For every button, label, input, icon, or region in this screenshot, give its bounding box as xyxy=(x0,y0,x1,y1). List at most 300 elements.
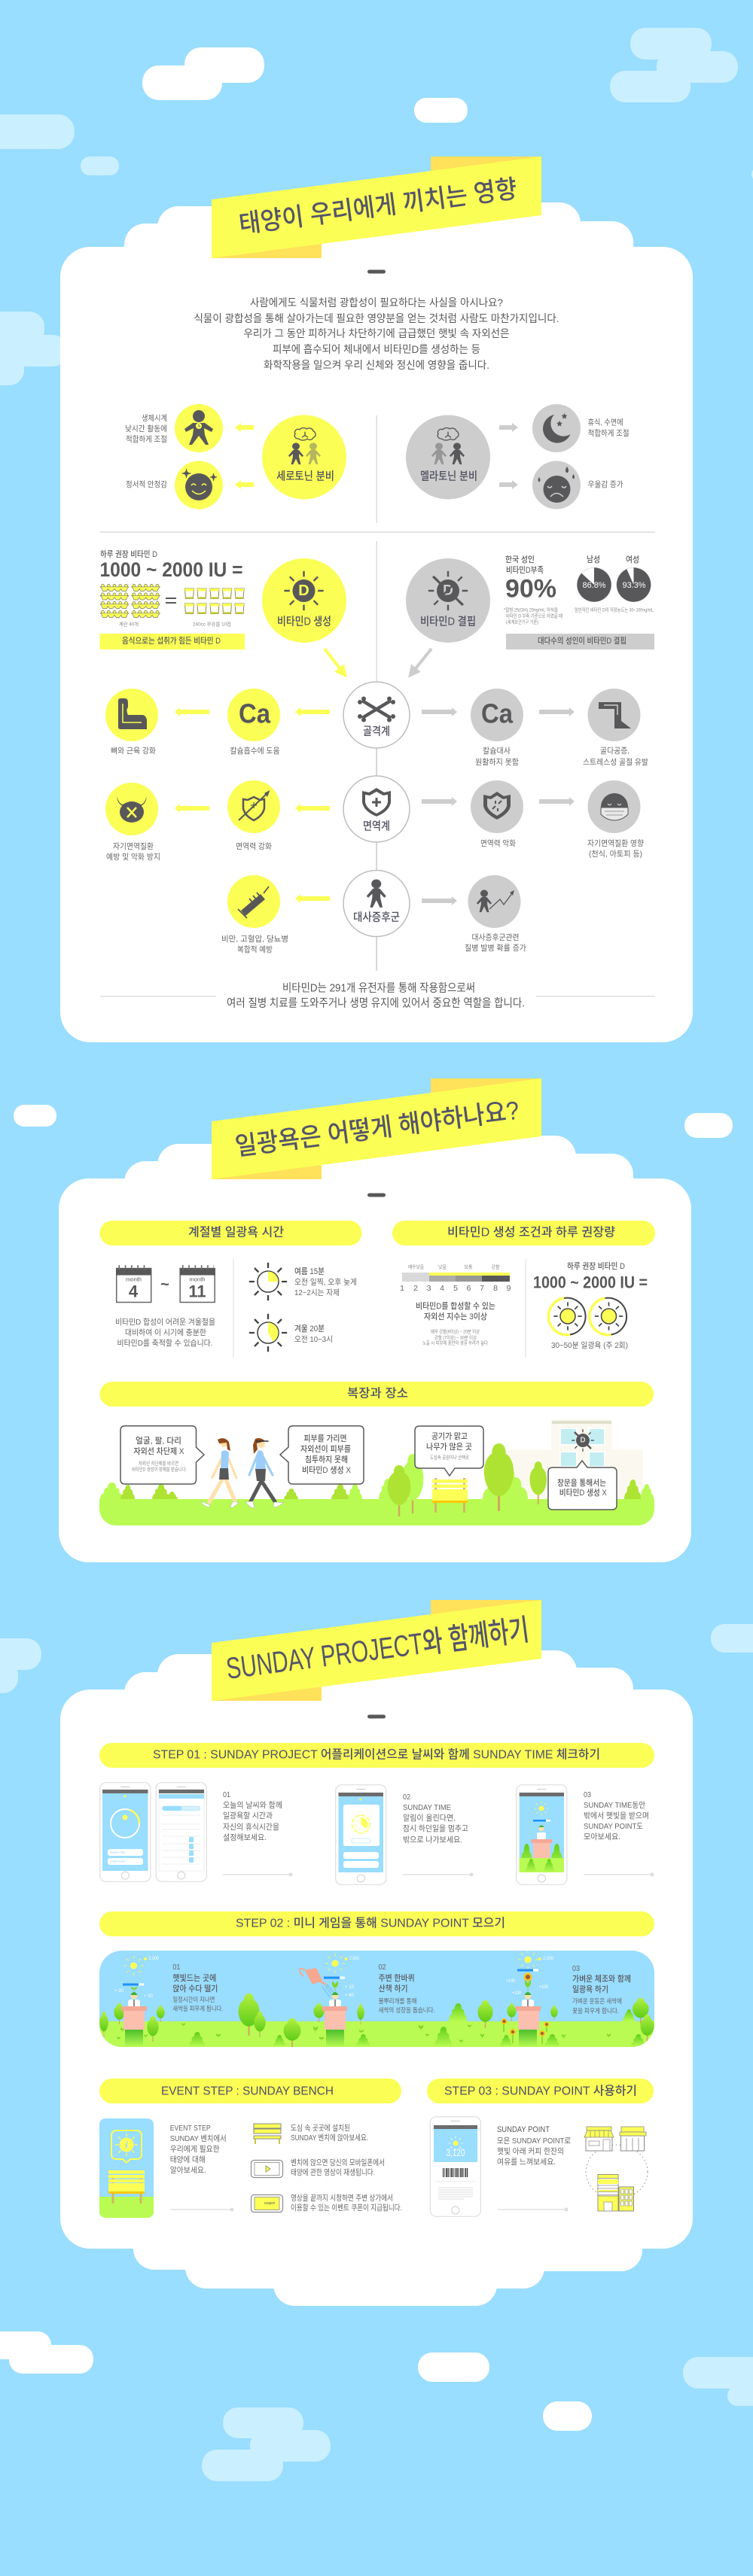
caption: (천식, 아토피 등) xyxy=(589,850,642,859)
icon: sun blocked by window xyxy=(572,1429,594,1452)
number: 1000 ~ 2000 IU = xyxy=(533,1273,648,1291)
icon: summer sun clock xyxy=(249,1263,287,1300)
game character 2 with watering can xyxy=(300,1954,360,2047)
caption: 30~50분 일광욕 (주 2회) xyxy=(551,1340,628,1350)
text: 이용할 수 있는 이벤트 쿠폰이 지급됩니다. xyxy=(291,2203,402,2213)
step text 02 xyxy=(379,1963,435,2014)
icon: sun arc 2 xyxy=(590,1298,626,1335)
text xyxy=(291,2193,402,2213)
building xyxy=(508,1419,643,1502)
game character 2 with watering can: 2,000 xyxy=(349,1957,360,1961)
tilde: ~ xyxy=(160,1276,169,1293)
step text 02: 물뿌리개를 통해 xyxy=(379,1997,417,2005)
callout: sunscreen: 자외선 차단제 X xyxy=(134,1446,184,1456)
text: 도심 속 곳곳에 설치된 xyxy=(291,2124,350,2133)
arrow xyxy=(175,707,209,716)
step 01 item 03 text: 03 xyxy=(584,1790,591,1799)
step text 01: 새싹을 피우게 됩니다. xyxy=(172,2005,223,2012)
game character 3 with flower: +100 xyxy=(512,1991,522,1996)
step 01: phone screen main xyxy=(100,1783,151,1881)
closing statement xyxy=(99,981,655,1010)
dotted ring xyxy=(586,2145,648,2199)
arrow xyxy=(295,804,330,813)
node: immune xyxy=(343,776,410,842)
text: summer: 12~2시는 자제 xyxy=(294,1288,340,1297)
scale numbers xyxy=(400,1284,511,1293)
icon: sun blocked by window: D xyxy=(580,1436,586,1445)
icon: broken leg xyxy=(587,689,640,741)
step 03: phone with barcode xyxy=(430,2117,480,2216)
step 01 item 02 text xyxy=(403,1793,473,1877)
callout: through window: 비타민D 생성 X xyxy=(559,1488,607,1498)
text: emotional stability: 정서적 안정감 xyxy=(126,480,167,489)
heading ribbon: section 2 xyxy=(212,1078,541,1179)
pie chart: male 86.8% xyxy=(577,567,611,602)
icon: broken sun D: D xyxy=(443,582,453,599)
step text 02: 산책 하기 xyxy=(379,1983,408,1994)
text: 벤치에 앉으면 당신의 모바일폰에서 xyxy=(291,2158,385,2167)
scale numbers: 8 xyxy=(493,1284,498,1293)
scale numbers: 7 xyxy=(480,1284,484,1293)
arrow xyxy=(295,707,330,716)
event step text: 알아보세요. xyxy=(170,2166,206,2175)
icon: strong muscle xyxy=(105,689,158,741)
arrow: grey to skeletal xyxy=(410,649,431,675)
icon: calcium absorption xyxy=(227,689,280,741)
game character 2 with watering can: + 60 xyxy=(345,1994,355,1998)
scale numbers: 3 xyxy=(427,1284,431,1293)
legend: 낮음 xyxy=(438,1263,447,1270)
game character 3 with flower: +100 xyxy=(506,1979,516,1984)
caption: 면역력 악화 xyxy=(480,839,516,848)
panel: section 1 white cloud card xyxy=(60,202,693,1042)
step text 01 xyxy=(172,1963,223,2012)
callout: through window: 창문을 통해서는 xyxy=(557,1478,606,1488)
arrow xyxy=(422,797,457,806)
footnotes: 일반적인 비타민 D의 적정농도는 30~100ng/mL xyxy=(575,607,654,613)
footnotes xyxy=(504,607,654,625)
vitamin D synthesis circle xyxy=(262,558,346,643)
pill heading: event step xyxy=(99,2079,401,2103)
step 01: phone screen settings xyxy=(156,1783,206,1881)
recommended exposure xyxy=(533,1261,648,1350)
section marker xyxy=(367,1714,386,1719)
icon: masked face xyxy=(587,780,640,833)
heading ribbon: section 2: 일광욕은 어떻게 해야하나요? xyxy=(233,1096,521,1161)
step 03 text: 여유를 느껴보세요. xyxy=(497,2158,556,2167)
intro text block: 사람에게도 식물처럼 광합성이 필요하다는 사실을 아시나요? xyxy=(250,297,503,309)
icon: yellow bench xyxy=(432,1478,468,1513)
text xyxy=(115,1318,215,1348)
icon: calcium metabolism poor: Ca xyxy=(481,698,514,728)
icon: person and rising chart xyxy=(468,875,521,928)
immune row xyxy=(105,776,644,862)
sprouts xyxy=(117,2023,611,2043)
notes xyxy=(422,1328,488,1346)
text xyxy=(416,1300,495,1321)
text: rest and sleep: 휴식, 수면에 xyxy=(588,418,623,427)
icon: body clock xyxy=(175,404,223,452)
icon: calcium absorption: Ca xyxy=(239,698,271,728)
callout xyxy=(99,634,245,649)
icon: phone coupon xyxy=(252,2194,283,2213)
icon: shield and spear xyxy=(227,780,280,833)
pill heading: step 03 xyxy=(427,2079,654,2103)
icon: phone play xyxy=(252,2160,283,2178)
trees xyxy=(388,1443,547,1516)
illustration: woman in shorts xyxy=(201,1438,239,1508)
icon: devil X xyxy=(105,783,158,835)
text: rest and sleep: 적합하게 조절 xyxy=(588,428,630,438)
callout: 음식으로는 섭취가 힘든 비타민 D xyxy=(122,635,221,646)
step 01 item 01 text: 자신의 휴식시간을 xyxy=(223,1823,279,1832)
arrow xyxy=(235,423,254,432)
game character 2 with watering can: + 10 xyxy=(345,1985,355,1990)
captions xyxy=(119,620,231,628)
equals sign xyxy=(166,598,176,603)
callout: sunscreen xyxy=(120,1426,204,1484)
icon: calcium metabolism poor xyxy=(471,689,523,741)
icon: dark person xyxy=(288,443,303,464)
caption: 뼈와 근육 강화 xyxy=(111,747,156,756)
callout: clean air: 공기가 맑고 xyxy=(431,1431,468,1441)
scale numbers: 9 xyxy=(507,1284,511,1293)
step 03 text: SUNDAY POINT xyxy=(497,2125,550,2134)
captions: 계란 40개 xyxy=(119,620,139,628)
section marker xyxy=(367,269,386,274)
label: 세로토닌 분비 xyxy=(276,470,334,483)
arrow xyxy=(295,894,330,903)
step text 01: 앉아 수다 떨기 xyxy=(172,1984,218,1994)
icon: sun D: D xyxy=(298,582,309,599)
heading: 한국 성인 xyxy=(505,555,535,564)
pill heading: step 03: STEP 03 : SUNDAY POINT 사용하기 xyxy=(444,2085,637,2098)
icon: calendar April: 4 xyxy=(129,1282,139,1300)
callout: skin covered: 비타민D 생성 X xyxy=(302,1465,352,1475)
step text 03: 03 xyxy=(572,1964,580,1973)
trees and bushes xyxy=(99,1994,654,2047)
labels: 여성 xyxy=(626,555,639,564)
labels xyxy=(587,555,639,564)
icon: brain xyxy=(294,428,316,440)
icon: 10 cups of milk xyxy=(185,588,244,614)
step 01 item 01 text: 일광욕할 시간과 xyxy=(223,1811,273,1820)
caption: 칼슘대사 xyxy=(483,746,511,756)
game character 1 xyxy=(114,1956,160,2047)
step 01 item 02 text: 02 xyxy=(403,1793,410,1802)
scale numbers: 5 xyxy=(453,1284,458,1293)
vitamin D deficiency circle xyxy=(406,558,490,643)
notes: 노출 시 피부에 홍반이 생길 우려가 높다 xyxy=(422,1340,488,1346)
caption: 복합적 예방 xyxy=(237,944,273,954)
captions: 240cc 우유를 10컵 xyxy=(193,622,231,628)
step text 01: 01 xyxy=(172,1963,181,1972)
icon: calendar November: month xyxy=(190,1278,206,1282)
caption xyxy=(583,747,648,767)
section marker xyxy=(367,1194,386,1197)
arrow xyxy=(422,707,457,716)
pill heading: clothing and place xyxy=(99,1382,654,1407)
text: body clock: 적합하게 조절 xyxy=(126,434,167,444)
pie chart: female 93.3% xyxy=(617,567,651,602)
pill heading: clothing and place: 복장과 장소 xyxy=(347,1386,408,1400)
notes: 매우 강함(9이상) – 20분 이상 xyxy=(431,1328,480,1335)
text: summer xyxy=(294,1267,357,1297)
event step text: 태양에 대해 xyxy=(170,2155,206,2164)
text: depression: 우울감 증가 xyxy=(588,480,623,489)
scale numbers: 4 xyxy=(440,1284,444,1293)
closing statement: 비타민D는 291개 유전자를 통해 작용함으로써 xyxy=(282,981,475,995)
scale numbers: 2 xyxy=(413,1284,418,1293)
closing statement: 여러 질병 치료를 도와주거나 생명 유지에 있어서 중요한 역할을 합니다. xyxy=(227,996,525,1010)
event step text: EVENT STEP xyxy=(170,2124,211,2133)
sun clocks xyxy=(249,1263,357,1352)
ground xyxy=(99,1499,654,1525)
divider lines xyxy=(233,1259,526,1358)
game character 1: 2,000 xyxy=(148,1957,160,1961)
arrow xyxy=(422,896,457,905)
text: 비타민D 합성이 어려운 겨울철을 xyxy=(115,1318,215,1327)
caption: 골다공증, xyxy=(600,747,630,756)
caption: 대사증후군관련 xyxy=(471,933,520,942)
step 01 item 03 text xyxy=(584,1790,654,1877)
text: 비타민D를 합성할 수 있는 xyxy=(416,1300,495,1311)
step 01 item 03 text: SUNDAY TIME동안 xyxy=(584,1801,645,1810)
text: SUNDAY 벤치에 앉아보세요. xyxy=(291,2133,368,2143)
step 01 item 02 text: 알림이 울린다면, xyxy=(403,1814,456,1823)
illustration: woman in leggings xyxy=(245,1438,284,1508)
game character 3 with flower: 2,000 xyxy=(543,1957,554,1961)
text: body clock xyxy=(125,414,167,444)
node: immune: 면역계 xyxy=(363,820,390,832)
step 03: phone with barcode: 3,120 xyxy=(446,2146,465,2158)
label: 비타민D 생성 xyxy=(277,616,331,628)
caption xyxy=(465,933,526,953)
panel: section 2 white cloud card xyxy=(59,1136,691,1562)
icon: serotonin circle xyxy=(262,415,346,500)
heading: 하루 권장 비타민 D xyxy=(100,549,157,559)
pie chart: male 86.8%: 86.8% xyxy=(583,581,606,590)
step 01 item 01 text: 01 xyxy=(223,1790,230,1799)
arrow xyxy=(539,707,575,716)
step 01 item 01 text xyxy=(223,1790,292,1877)
text: summer: 여름 15분 xyxy=(294,1267,325,1276)
skeletal row xyxy=(105,682,648,767)
melatonin group xyxy=(406,404,630,509)
callout: sunscreen: 비타민D 생성이 방해를 받습니다. xyxy=(132,1466,187,1472)
icon: syringe xyxy=(227,875,280,928)
heading: 하루 권장 비타민 D xyxy=(567,1261,625,1271)
icon: calendar April xyxy=(116,1267,151,1302)
step text 02: 새싹의 성장을 돕습니다. xyxy=(379,2006,435,2014)
legend: 매우낮음 xyxy=(408,1263,424,1270)
caption: 자기면역질환 xyxy=(113,842,154,851)
heading: 비타민D부족 xyxy=(506,565,544,575)
step text 01: 햇빛드는 곳에 xyxy=(172,1972,216,1983)
event step text xyxy=(170,2124,233,2211)
icon: sad face xyxy=(532,461,581,509)
icon: winter sun clock xyxy=(249,1314,287,1352)
caption: 스트레스성 골절 유발 xyxy=(583,757,648,767)
icon: info bubble: i xyxy=(125,2139,128,2151)
icon: smile xyxy=(175,461,223,509)
icon: melatonin circle xyxy=(406,415,490,500)
bushes xyxy=(100,1467,654,1500)
step text 01: 일정시간이 지나면 xyxy=(172,1996,215,2003)
caption xyxy=(587,839,644,859)
text: summer: 오전 일찍, 오후 늦게 xyxy=(294,1277,357,1287)
caption: 칼슘흡수에 도움 xyxy=(230,746,280,756)
icon: shop 1 xyxy=(584,2127,614,2151)
icon: bench outline xyxy=(254,2124,281,2144)
game character 3 with flower: +100 xyxy=(539,1985,549,1990)
text: body clock: 낮시간 활동에 xyxy=(125,424,167,433)
icon: dark person xyxy=(450,443,465,464)
serotonin group xyxy=(125,404,346,509)
step 01: phone game xyxy=(517,1785,567,1884)
caption xyxy=(475,746,519,767)
panel: sunday bench card xyxy=(99,2118,154,2218)
icon: buildings xyxy=(598,2175,634,2211)
game character 3 with flower xyxy=(506,1950,554,2047)
icon: weakened shield xyxy=(471,780,523,833)
text xyxy=(291,2158,385,2177)
step text 02: 02 xyxy=(379,1963,386,1972)
caption: 원활하지 못함 xyxy=(475,757,519,767)
pill heading: vitamin D conditions xyxy=(392,1221,655,1245)
icon: faded person xyxy=(306,443,321,464)
heading ribbon: section 3: SUNDAY PROJECT와 함께하기 xyxy=(224,1613,531,1686)
caption xyxy=(106,842,160,862)
pill heading: step 01 xyxy=(99,1743,654,1768)
pill heading: vitamin D conditions: 비타민D 생성 조건과 하루 권장량 xyxy=(447,1225,615,1239)
pill heading: seasonal time: 계절별 일광욕 시간 xyxy=(188,1225,284,1239)
metabolic row xyxy=(221,870,526,954)
pill heading: event step: EVENT STEP : SUNDAY BENCH xyxy=(161,2085,334,2098)
game character 1: + 30 xyxy=(144,1994,154,1999)
callout: skin covered: 피부를 가리면 xyxy=(304,1434,346,1443)
legend xyxy=(408,1263,500,1270)
step text 02: 주변 한바퀴 xyxy=(379,1973,415,1983)
notes: 강함 (7이상) – 30분 이상 xyxy=(434,1334,477,1341)
caption: 면역력 강화 xyxy=(236,842,272,851)
caption xyxy=(221,934,288,954)
event step text: 우리에게 필요한 xyxy=(170,2145,220,2154)
callout: through window xyxy=(548,1461,617,1510)
clouds: between sections xyxy=(0,1105,753,1693)
UV index chart xyxy=(400,1263,511,1346)
callout: clean air xyxy=(415,1426,483,1476)
panel: Korean adult deficiency stats xyxy=(504,555,654,649)
arrow xyxy=(235,480,254,489)
arrow xyxy=(499,480,518,489)
callout: sunscreen: 얼굴, 팔, 다리 xyxy=(136,1435,181,1446)
step 03 text xyxy=(497,2125,571,2211)
sunflowers xyxy=(501,2018,550,2044)
step text 03: 가벼운 운동은 새싹에 xyxy=(572,1997,622,2005)
pill heading: seasonal time xyxy=(99,1221,361,1245)
node: skeletal: 골격계 xyxy=(363,725,390,738)
icon: calendar April: month xyxy=(126,1278,142,1282)
heading ribbon: section 1: 태양이 우리에게 끼치는 영향 xyxy=(237,175,519,239)
scale numbers: 6 xyxy=(467,1284,471,1293)
callout: skin covered: 침투하지 못해 xyxy=(305,1455,348,1464)
footnotes: (세계보건기구 기준) xyxy=(506,619,538,625)
pill heading: step 02 xyxy=(99,1911,654,1936)
intro text block: 우리가 그 동안 피하거나 차단하기에 급급했던 햇빛 속 자외선은 xyxy=(244,327,510,339)
text: winter: 겨울 20분 xyxy=(294,1324,325,1334)
heading ribbon: section 3 xyxy=(212,1600,541,1701)
label: 멜라토닌 분비 xyxy=(420,470,477,483)
text: 대비하여 이 시기에 충분한 xyxy=(125,1328,206,1337)
icon: calendar November: 11 xyxy=(188,1282,206,1300)
panel: section 3 white cloud card xyxy=(60,1650,693,2306)
text: 태양에 관한 영상이 재생됩니다. xyxy=(291,2167,375,2177)
step text 03: 가벼운 체조와 함께 xyxy=(572,1973,631,1984)
intro text block: 식물이 광합성을 통해 살아가는데 필요한 영양분을 얻는 것처럼 사람도 마찬가지입니다. xyxy=(194,312,559,324)
step 01 item 01 text: 설정해보세요. xyxy=(223,1832,267,1842)
clouds: bottom xyxy=(0,2331,753,2481)
icon: sun arc 1 xyxy=(548,1298,586,1335)
icon: bench xyxy=(108,2170,145,2203)
calendars xyxy=(115,1267,215,1348)
caption: 비만, 고혈압, 당뇨병 xyxy=(221,934,288,944)
step 01 item 02 text: 밖으로 나가보세요. xyxy=(403,1835,462,1845)
number: 1000 ~ 2000 IU = xyxy=(99,558,242,581)
arrow xyxy=(175,804,209,813)
step 03 text: 모은 SUNDAY POINT로 xyxy=(497,2137,571,2146)
clouds: top xyxy=(0,28,753,385)
step text 03 xyxy=(572,1964,631,2015)
panel: mini game scene xyxy=(99,1950,654,2047)
step 01: phone alarm xyxy=(336,1785,386,1884)
node: metabolic syndrome: 대사증후군 xyxy=(353,911,400,924)
step 03 text: 햇빛 아래 커피 한잔의 xyxy=(497,2147,564,2156)
callout: skin covered: 자외선이 피부를 xyxy=(300,1444,351,1454)
pie chart: female 93.3%: 93.3% xyxy=(622,581,646,590)
text: winter: 오전 10~3시 xyxy=(294,1335,333,1344)
caption: 자기면역질환 영향 xyxy=(587,839,644,848)
step 01 item 02 text: SUNDAY TIME xyxy=(403,1803,451,1812)
event items xyxy=(252,2124,402,2213)
scale numbers: 1 xyxy=(400,1284,404,1293)
icon: shop 2 xyxy=(620,2127,646,2151)
callout: sunscreen: 자외선 차단제를 바르면 xyxy=(139,1460,178,1466)
heading ribbon: section 1 xyxy=(212,157,541,258)
arrow xyxy=(499,423,518,432)
step 01 item 03 text: 모아보세요. xyxy=(584,1832,620,1842)
node: skeletal xyxy=(343,682,410,748)
callout xyxy=(506,634,654,649)
text xyxy=(291,2124,368,2143)
step 01: phone screen main: SUNDAY TIME xyxy=(110,1851,125,1854)
step text 03: 일광욕 하기 xyxy=(572,1984,608,1994)
icon: brain xyxy=(437,428,459,440)
legend: 강함 xyxy=(491,1263,500,1270)
arrow xyxy=(539,797,575,806)
step 01: phone screen main: SUNDAY POINT xyxy=(110,1860,125,1863)
caption: 예방 및 악화 방지 xyxy=(106,852,160,862)
callout: clean air: 나무가 많은 곳 xyxy=(426,1442,472,1452)
callout: clean air: 도심속 공원이나 산책로 xyxy=(430,1454,469,1460)
intro text block: 화학작용을 일으켜 우리 신체와 정신에 영향을 줍니다. xyxy=(264,359,489,371)
icon: faded person xyxy=(431,443,447,464)
game character 1: + 30 xyxy=(114,1989,124,1994)
caption: 질병 발병 확률 증가 xyxy=(465,943,526,953)
text: winter xyxy=(294,1324,333,1344)
step 01 item 03 text: SUNDAY POINT도 xyxy=(584,1822,643,1831)
callout: 대다수의 성인이 비타민D 결핍 xyxy=(538,635,626,646)
